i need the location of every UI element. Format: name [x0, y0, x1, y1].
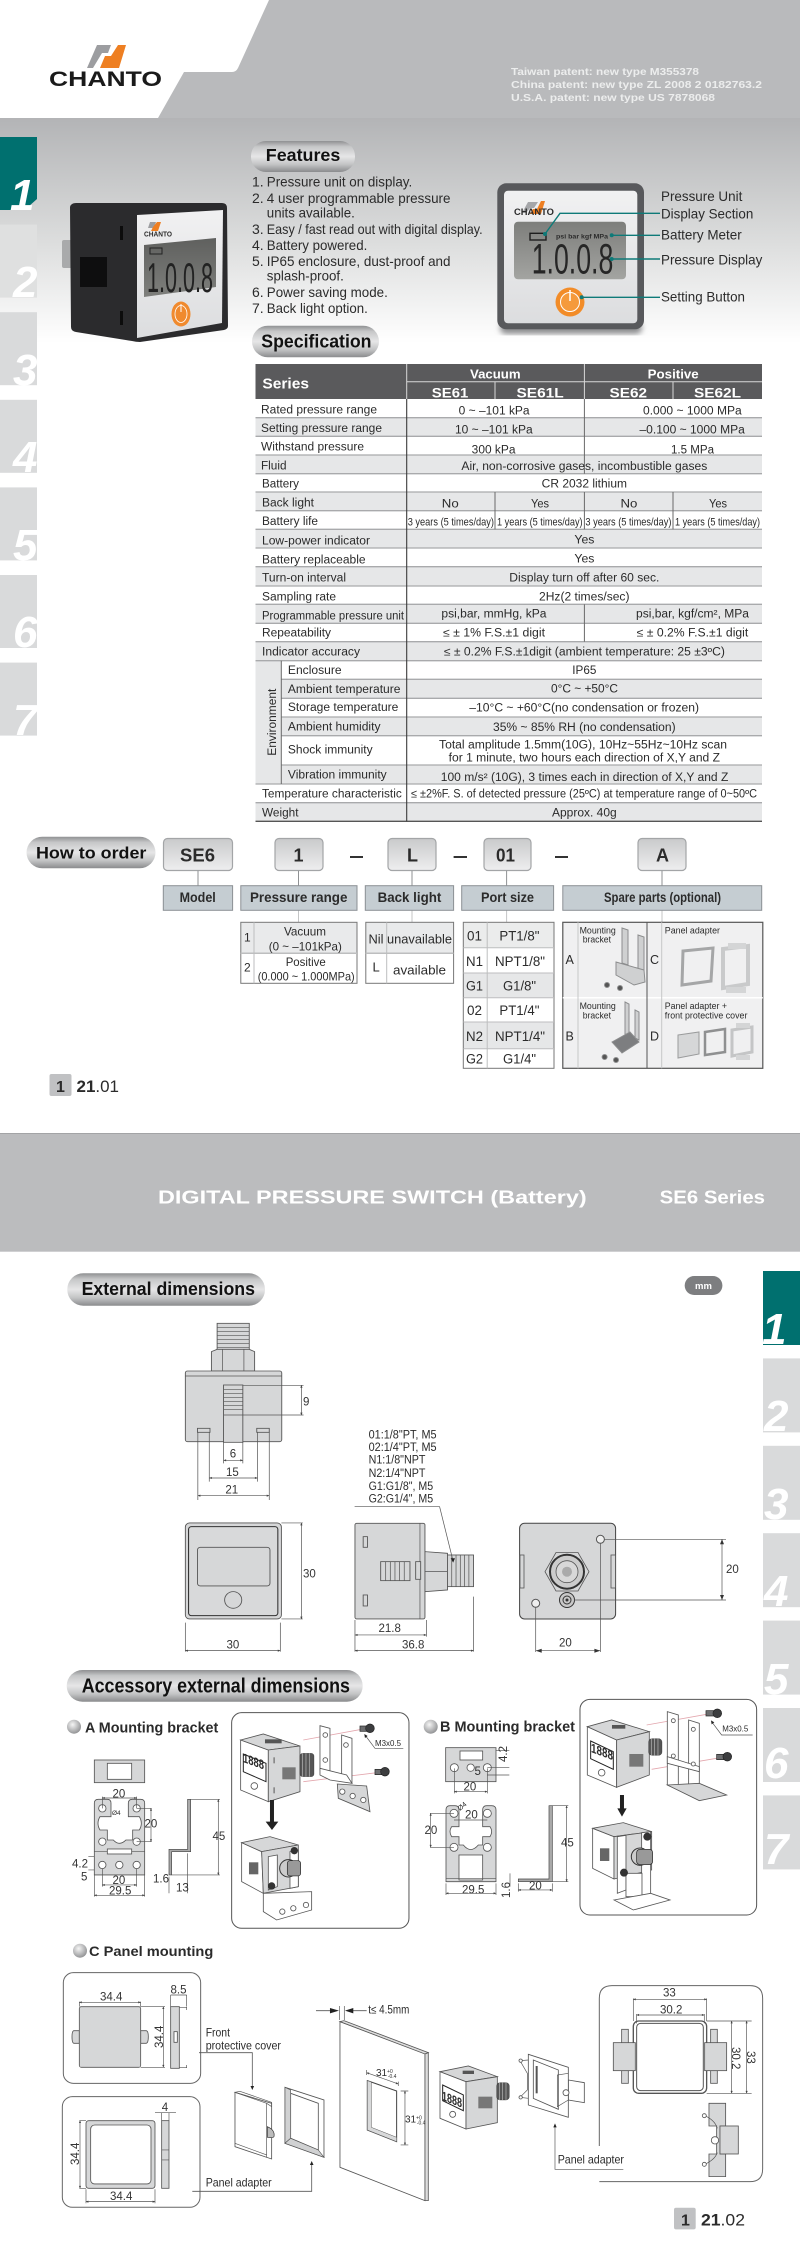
port code list: G1:G1/8", M5 [369, 1481, 433, 1493]
drawing: protective cover dimensions: 34.4 [100, 1991, 123, 2003]
table: port size: G1 [466, 978, 483, 993]
table: pressure range: 2 [244, 961, 251, 975]
row values: 0°C ~ +50°C [551, 684, 618, 696]
features list [252, 174, 483, 316]
heading: Specification: Specification [261, 331, 372, 351]
patent text: China patent: new type ZL 2008 2 0182763.2 [511, 79, 762, 91]
table: spare parts: Panel adapter + [665, 1001, 727, 1011]
product front view with callouts: Pressure Display [661, 251, 762, 267]
side tabs: page 1: 6 [13, 608, 38, 657]
icon: assembled device [593, 1823, 670, 1910]
drawing: device and adapter assembly: 1888 [442, 2088, 462, 2111]
port code list: 01:1/8"PT, M5 [369, 1429, 437, 1441]
heading: How to order [26, 837, 156, 868]
drawing: device and adapter assembly: Panel adapter [558, 2152, 624, 2166]
drawing: bracket B dimensions: 5 [474, 1766, 481, 1778]
table: pressure range: 1 [244, 931, 251, 945]
icon: screws [706, 1709, 732, 1761]
features list: Easy / fast read out with digital display. [267, 221, 483, 237]
features list: Back light option. [267, 300, 368, 316]
table: port size: PT1/4" [499, 1003, 540, 1018]
features list: Battery powered. [267, 237, 367, 253]
drawing: mounting panel: +0 [416, 2116, 422, 2122]
port code list: N1:1/8"NPT [369, 1455, 425, 1467]
patent text: U.S.A. patent: new type US 7878068 [511, 92, 715, 104]
icon: arrow down [617, 1795, 627, 1817]
drawing: bracket A dimensions: 4.2 [72, 1858, 88, 1870]
features list: 4 user programmable pressure [267, 190, 451, 206]
icon: panel adapters C [682, 943, 748, 993]
row labels: Vibration immunity [288, 770, 387, 782]
drawing: panel adapter dimensions: 4 [162, 2102, 169, 2114]
callout: panel adapter: Panel adapter [206, 2176, 272, 2190]
table: port size: N1 [466, 954, 483, 969]
table: back light: available [393, 962, 446, 977]
row values: Yes [709, 498, 727, 510]
table: spare parts: Mounting [580, 925, 616, 935]
row values: –0.100 ~ 1000 MPa [640, 425, 745, 437]
row labels: Indicator accuracy [262, 646, 360, 658]
row values: Display turn off after 60 sec. [509, 573, 659, 585]
heading: Accessory external dimensions [67, 1670, 363, 1702]
patent text: Taiwan patent: new type M355378 [511, 66, 699, 78]
drawing: mounting panel: 31 [405, 2115, 416, 2126]
features list: IP65 enclosure, dust-proof and [267, 253, 450, 269]
table: pressure range: (0.000 ~ 1.000MPa) [258, 970, 355, 984]
drawing: bracket B dimensions: 20 [464, 1782, 476, 1794]
row labels: Back light [262, 497, 315, 509]
row labels: Battery life [262, 516, 318, 528]
callout: front protective cover: protective cover [206, 2038, 281, 2052]
icon: device [587, 1720, 662, 1787]
side tabs: page 2 [762, 1271, 800, 1874]
row values: 300 kPa [472, 444, 516, 456]
drawing: side view [355, 1507, 474, 1652]
drawing: bracket B dimensions: 20 [424, 1825, 437, 1837]
drawing: bracket B dimensions: 4.2 [498, 1746, 510, 1762]
drawing: protective cover dimensions: 8.5 [170, 1984, 186, 1996]
logo: CHANTO: CHANTO [49, 68, 162, 91]
panel: bracket B assembly: 1888 [591, 1740, 613, 1763]
order category headers: Pressure range [250, 889, 348, 905]
row labels: Setting pressure range [261, 423, 382, 435]
page number 21.01 [50, 1074, 119, 1096]
table: port size: N2 [466, 1029, 483, 1044]
row labels: Shock immunity [288, 745, 373, 757]
drawing: side view: 36.8 [402, 1640, 424, 1652]
table: port size: G1/4" [503, 1052, 536, 1067]
row values: psi,bar, kgf/cm², MPa [636, 609, 750, 621]
table: spare parts: B [566, 1030, 574, 1044]
row values: ≤ ± 1% F.S.±1 digit [443, 628, 546, 640]
patent text [511, 66, 762, 104]
row values: 0 ~ –101 kPa [459, 405, 530, 417]
drawing: side view: 21.8 [378, 1623, 401, 1635]
table: port size [463, 922, 554, 1068]
row values: 1.5 MPa [671, 444, 715, 456]
side tabs: page 1: 4 [12, 433, 37, 482]
features list: 5. [252, 253, 264, 269]
table: spare parts: C [650, 953, 659, 967]
row values: Yes [531, 498, 549, 510]
table: back light: unavailable [387, 931, 452, 946]
drawing: bracket A dimensions: Ø4 [112, 1810, 121, 1817]
drawing: rear view: 20 [559, 1638, 572, 1650]
drawing: mounting panel: t≤ 4.5mm [368, 2004, 409, 2016]
drawing: protective cover dimensions: 34.4 [154, 2025, 166, 2048]
table: port size: 02 [467, 1003, 482, 1018]
order category headers: Spare parts (optional) [604, 890, 721, 905]
order code boxes: SE6 [180, 846, 215, 866]
table: port size: PT1/8" [499, 929, 540, 944]
heading: Accessory external dimensions: Accessory external dimensions [82, 1676, 350, 1698]
row labels: Sampling rate [262, 592, 336, 604]
panel: bracket A assembly: M3x0.5 [375, 1739, 402, 1748]
product photo: left: CHANTO [144, 232, 173, 238]
drawing: mounting panel: 31 [376, 2068, 387, 2079]
side tabs: page 2: 5 [764, 1655, 789, 1704]
row values: Yes [574, 553, 595, 565]
drawing: top view: 21 [225, 1485, 238, 1497]
row values: CR 2032 lithium [542, 479, 627, 491]
order code boxes [164, 838, 686, 922]
drawing: bracket B dimensions: 1.6 [501, 1882, 513, 1898]
table: pressure range: Vacuum [284, 925, 326, 939]
row labels: Programmable pressure unit [262, 610, 405, 622]
row values: No [620, 498, 637, 510]
panel: panel adapter dimensions: 30.2 [660, 2004, 682, 2016]
heading: A Mounting bracket: A Mounting bracket [85, 1721, 218, 1737]
table header: Positive [648, 367, 699, 381]
drawing: bracket A dimensions: 29.5 [109, 1885, 131, 1897]
drawing: bracket B dimensions [424, 1746, 574, 1898]
drawing: top view: 15 [226, 1467, 239, 1479]
drawing: panel adapter dimensions: 34.4 [70, 2142, 82, 2165]
drawing: bracket A dimensions: 20 [112, 1788, 125, 1800]
product front view with callouts: 1.0.0.8 [532, 235, 613, 283]
table header: SE62 [610, 385, 647, 400]
table: spare parts: Mounting [580, 1001, 616, 1011]
product front view with callouts: Display Section [661, 205, 753, 221]
drawing: bracket A dimensions [72, 1760, 225, 1897]
order code boxes: 1 [294, 846, 304, 866]
table: port size: NPT1/8" [495, 954, 545, 969]
row values: 10 ~ –101 kPa [455, 425, 533, 437]
title band: page 2: SE6 Series [660, 1187, 765, 1207]
icon: assembled device [242, 1837, 312, 1920]
row values: for 1 minute, two hours each direction of X,Y and Z [449, 752, 720, 764]
panel: bracket B assembly: M3x0.5 [722, 1725, 749, 1734]
table header: SE62L [694, 385, 741, 400]
drawing: bracket B dimensions: 45 [561, 1838, 574, 1850]
row values: Yes [574, 535, 595, 547]
port code list: 02:1/4"PT, M5 [369, 1442, 437, 1454]
row values: Total amplitude 1.5mm(10G), 10Hz~55Hz~10Hz scan [439, 739, 727, 751]
drawing: device and adapter assembly [440, 2054, 624, 2169]
drawing: mounting panel: -0.4 [388, 2074, 397, 2080]
side tabs: page 2: 4 [763, 1567, 788, 1616]
row labels: Turn-on interval [262, 573, 346, 585]
row labels: Battery replaceable [262, 554, 366, 566]
row values: No [442, 498, 459, 510]
product front view with callouts: Setting Button [661, 289, 745, 305]
table header: Vacuum [470, 367, 521, 381]
features list: 1. [252, 174, 264, 190]
row labels: Fluid [261, 460, 286, 472]
table header: SE61 [432, 385, 469, 400]
page number 21.01: 21.01 [76, 1077, 119, 1096]
heading: Features [251, 141, 355, 172]
features list: 4. [252, 237, 264, 253]
panel: panel adapter dimensions: 33 [663, 1988, 676, 2000]
drawing: bracket A dimensions: 20 [112, 1875, 125, 1887]
table: back light [366, 922, 454, 983]
row labels: Weight [262, 808, 299, 820]
row values: 2Hz(2 times/sec) [539, 591, 630, 603]
heading: Features: Features [266, 145, 341, 165]
row values: Approx. 40g [552, 808, 617, 820]
panel: bracket A assembly [232, 1713, 409, 1928]
icon: arrow down [266, 1800, 278, 1830]
callout: front protective cover [199, 2026, 281, 2090]
heading: How to order: How to order [36, 843, 147, 862]
order category headers: Model [180, 889, 216, 905]
side tabs: page 1: 5 [13, 521, 38, 570]
side tabs: page 2: 1 [762, 1305, 786, 1354]
row labels [261, 404, 405, 820]
page number 21.02: 21.02 [701, 2211, 745, 2230]
row values: 35% ~ 85% RH (no condensation) [493, 722, 676, 734]
drawing: top view: 6 [230, 1449, 236, 1461]
drawing: panel adapter dimensions [62, 2097, 200, 2207]
side tabs: page 1: 1 [10, 171, 34, 220]
callout: panel adapter [192, 2161, 314, 2191]
port code list: G2:G1/4", M5 [369, 1494, 433, 1506]
row labels: Rated pressure range [261, 404, 377, 416]
order code boxes: 01 [496, 846, 515, 866]
unit badge: mm [685, 1276, 722, 1295]
panel: panel adapter dimensions [599, 1986, 763, 2182]
drawing: rear view: 20 [726, 1564, 739, 1576]
row labels: Storage temperature [288, 702, 398, 714]
panel: bracket B assembly [580, 1699, 757, 1915]
drawing: top view: 9 [303, 1396, 309, 1408]
side tabs: page 2: 7 [764, 1825, 791, 1874]
icon: screws [360, 1724, 389, 1776]
side tabs: page 1 [0, 137, 40, 745]
icon: bracket [303, 1726, 385, 1812]
table header [262, 367, 741, 400]
row values: ≤ ± 0.2% F.S.±1digit (ambient temperature: 25 ±3ºC) [444, 647, 725, 659]
features list: 7. [252, 300, 264, 316]
page number 21.02: 1 [681, 2213, 690, 2230]
icon: bracket [647, 1712, 727, 1801]
features list: 3. [252, 221, 264, 237]
drawing: front view [185, 1523, 316, 1652]
title band: page 2: DIGITAL PRESSURE SWITCH (Battery) [158, 1187, 587, 1207]
row values: 3 years (5 times/day) [585, 516, 672, 528]
product front view with callouts: CHANTO [514, 207, 554, 217]
table: port size: 01 [467, 929, 482, 944]
product photo: left: 1.0.0.8 [147, 254, 213, 301]
order category headers: Port size [481, 889, 534, 905]
row values: ≤ ± 0.2% F.S.±1 digit [637, 628, 749, 640]
table: spare parts: A [566, 953, 574, 967]
page number 21.01: 1 [56, 1079, 65, 1096]
order category headers: Back light [378, 889, 442, 905]
table: back light: Nil [368, 931, 384, 946]
table: port size: G2 [466, 1052, 483, 1067]
row values [408, 405, 760, 820]
row labels: Low-power indicator [262, 536, 370, 548]
row labels: Environment [267, 688, 279, 756]
drawing: bracket A dimensions: 13 [176, 1883, 189, 1895]
product front view with callouts: Battery Meter [661, 226, 742, 242]
drawing: protective cover dimensions [63, 1973, 201, 2083]
icon: device [241, 1734, 314, 1802]
drawing: bracket B dimensions: 29.5 [462, 1884, 484, 1896]
row values: 1 years (5 times/day) [497, 516, 583, 528]
header band [0, 0, 800, 343]
side tabs: page 2: 6 [764, 1739, 789, 1788]
product front view with callouts: psi bar kgf MPa [556, 234, 609, 240]
row values: Air, non-corrosive gases, incombustible gases [461, 461, 708, 473]
drawing: bracket B dimensions: 20 [465, 1809, 478, 1821]
panel: panel adapter dimensions: 33 [744, 2051, 756, 2064]
drawing: bracket A dimensions: 20 [144, 1819, 157, 1831]
row labels: Repeatability [262, 627, 331, 639]
features list: 6. [252, 284, 264, 300]
drawing: cover and adapter isometric [235, 2087, 324, 2159]
specification table [256, 364, 762, 821]
heading: Specification [252, 326, 379, 357]
title band: page 2 [0, 1133, 800, 1252]
icon: mounting bracket B [602, 1002, 639, 1062]
drawing: bracket A dimensions: 1.6 [153, 1874, 169, 1886]
panel: bracket A assembly: 1888 [243, 1750, 264, 1773]
drawing: bracket A dimensions: 5 [81, 1872, 87, 1884]
table: spare parts [563, 922, 763, 1068]
drawing: mounting panel [316, 2004, 428, 2201]
unit badge: mm: mm [695, 1281, 712, 1292]
icon: mounting bracket A [604, 928, 645, 990]
drawing: mounting panel: -0.4 [417, 2121, 426, 2127]
drawing: bracket B dimensions: 20 [529, 1880, 542, 1892]
table header: Series [262, 376, 309, 392]
product photo: left [62, 203, 228, 342]
page number 21.02 [674, 2208, 745, 2230]
row labels: Enclosure [288, 665, 342, 677]
side tabs: page 2: 3 [764, 1480, 788, 1529]
drawing: front view: 30 [226, 1640, 239, 1652]
row labels: Battery [262, 479, 299, 491]
features list: units available. [267, 204, 355, 220]
table header: SE61L [516, 385, 564, 400]
icon: panel adapter set D [678, 1023, 752, 1060]
row values: psi,bar, mmHg, kPa [441, 609, 547, 621]
features list: Pressure unit on display. [267, 174, 412, 190]
heading: External dimensions [67, 1273, 265, 1306]
row labels: Ambient temperature [288, 684, 400, 696]
features list: Power saving mode. [267, 284, 388, 300]
side tabs: page 1: 7 [13, 696, 40, 745]
port code list [369, 1429, 437, 1506]
heading: B Mounting bracket: B Mounting bracket [440, 1720, 575, 1736]
heading: External dimensions: External dimensions [82, 1279, 255, 1299]
port code list: N2:1/4"NPT [369, 1468, 425, 1480]
side tabs: page 1: 2 [12, 258, 38, 307]
table: spare parts: bracket [583, 935, 611, 945]
drawing: front view: 30 [303, 1568, 316, 1580]
heading: C Panel mounting: C Panel mounting [89, 1943, 213, 1959]
table: spare parts: front protective cover [665, 1010, 747, 1020]
table: spare parts: Panel adapter [665, 925, 720, 935]
drawing: mounting panel: +0 [387, 2069, 393, 2075]
table: port size: NPT1/4" [495, 1029, 545, 1044]
table: spare parts: bracket [583, 1010, 611, 1020]
features list: 2. [252, 190, 264, 206]
order category headers [163, 886, 762, 910]
table: pressure range [241, 922, 357, 984]
drawing: bracket B dimensions: Ø4 [457, 1801, 469, 1813]
row values: IP65 [572, 665, 596, 677]
drawing: rear view [520, 1523, 739, 1653]
features list: splash-proof. [267, 268, 344, 284]
panel: panel adapter dimensions: 30.2 [729, 2047, 741, 2069]
row values: –10°C ~ +60°C(no condensation or frozen) [469, 703, 699, 715]
row values: 3 years (5 times/day) [408, 516, 494, 528]
row values: 0.000 ~ 1000 MPa [643, 405, 742, 417]
table: back light: L [372, 960, 380, 975]
side tabs: page 2: 2 [763, 1392, 789, 1441]
drawing: panel adapter dimensions: 34.4 [110, 2191, 133, 2203]
order code boxes: L [407, 846, 418, 866]
table: pressure range: Positive [286, 955, 326, 969]
row values: ≤ ±2%F. S. of detected pressure (25ºC) at temperature range of 0~50ºC [411, 788, 757, 800]
row values: 100 m/s² (10G), 3 times each in direction of X,Y and Z [441, 772, 728, 784]
product front view with callouts [497, 183, 762, 334]
table: pressure range: (0 ~ –101kPa) [269, 940, 342, 954]
logo: CHANTO [49, 45, 162, 91]
drawing: bracket A dimensions: 45 [212, 1831, 225, 1843]
order code boxes: A [656, 846, 669, 866]
product front view with callouts: Pressure Unit [661, 188, 742, 204]
table: port size: G1/8" [503, 978, 536, 993]
callout: front protective cover: Front [206, 2026, 231, 2040]
row labels: Ambient humidity [288, 721, 381, 733]
table: spare parts: D [650, 1030, 659, 1044]
side tabs: page 1: 3 [13, 346, 37, 395]
row values: 1 years (5 times/day) [675, 516, 760, 528]
row labels: Withstand pressure [261, 442, 364, 454]
row labels: Temperature characteristic [262, 788, 402, 800]
drawing: top view [185, 1323, 309, 1500]
